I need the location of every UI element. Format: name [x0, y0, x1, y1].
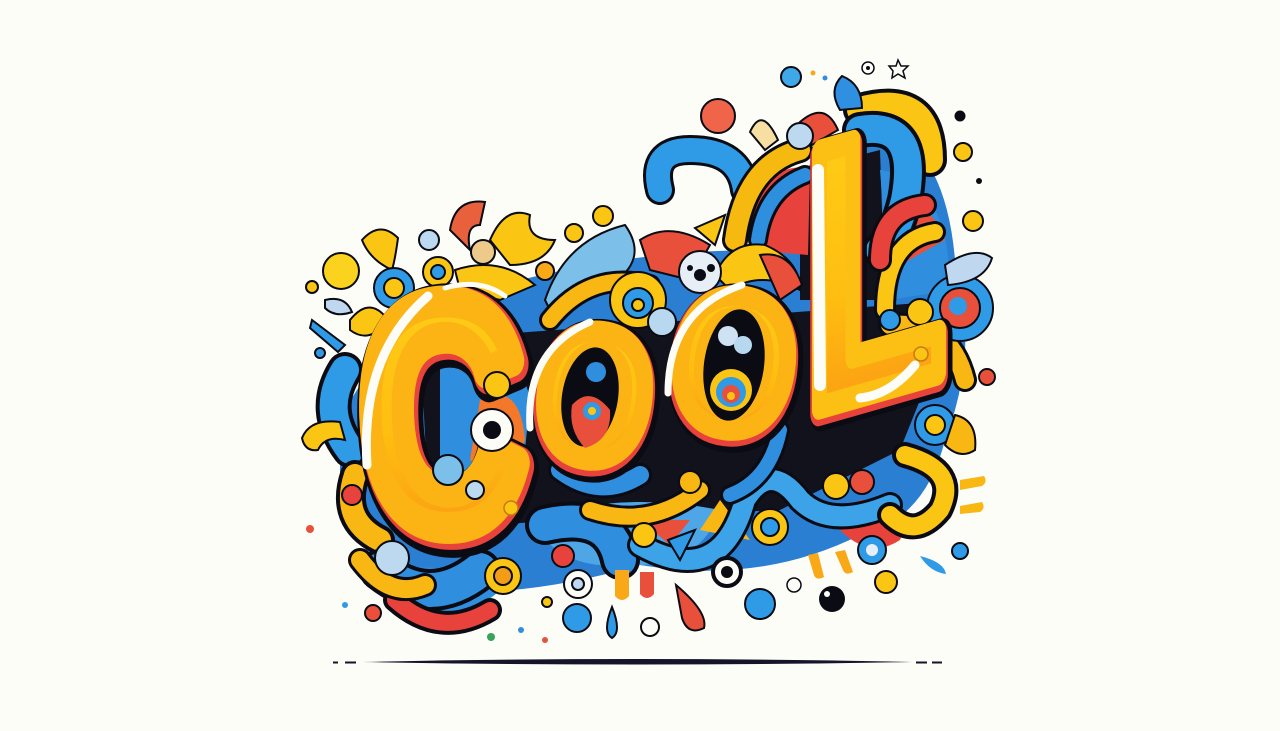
letter o: O	[664, 255, 808, 481]
letter l: L	[806, 41, 948, 496]
letter o: O	[662, 250, 806, 476]
inner swirl inside the C	[433, 372, 513, 499]
letter o: O	[529, 293, 664, 509]
illustration backdrop: colour mass behind the letters	[340, 120, 965, 592]
letter o: O	[527, 288, 662, 503]
hole of second o with decorations	[696, 305, 772, 425]
swirls: centre top cluster	[545, 215, 802, 336]
letter C: C	[359, 239, 533, 602]
scattered dots	[306, 62, 995, 643]
swirls: upper right cluster	[658, 76, 993, 380]
letter C: C	[355, 233, 529, 596]
swirls: upper left cluster	[310, 202, 555, 352]
letter C: C	[357, 236, 531, 599]
icon: star	[889, 60, 908, 78]
hole of first o with decorations	[555, 343, 625, 451]
swirls: bottom wave and lower right cluster	[545, 405, 986, 600]
letter o: O	[527, 291, 662, 506]
swirls: left and lower-left cluster	[302, 370, 521, 623]
ground shadow	[333, 659, 942, 664]
letter l: L	[804, 39, 946, 495]
letter l: L	[804, 36, 946, 491]
word: Cool	[355, 35, 948, 602]
colour patches between the shapes	[400, 168, 950, 612]
letter o: O	[662, 253, 806, 479]
highlights on letters	[366, 170, 928, 515]
